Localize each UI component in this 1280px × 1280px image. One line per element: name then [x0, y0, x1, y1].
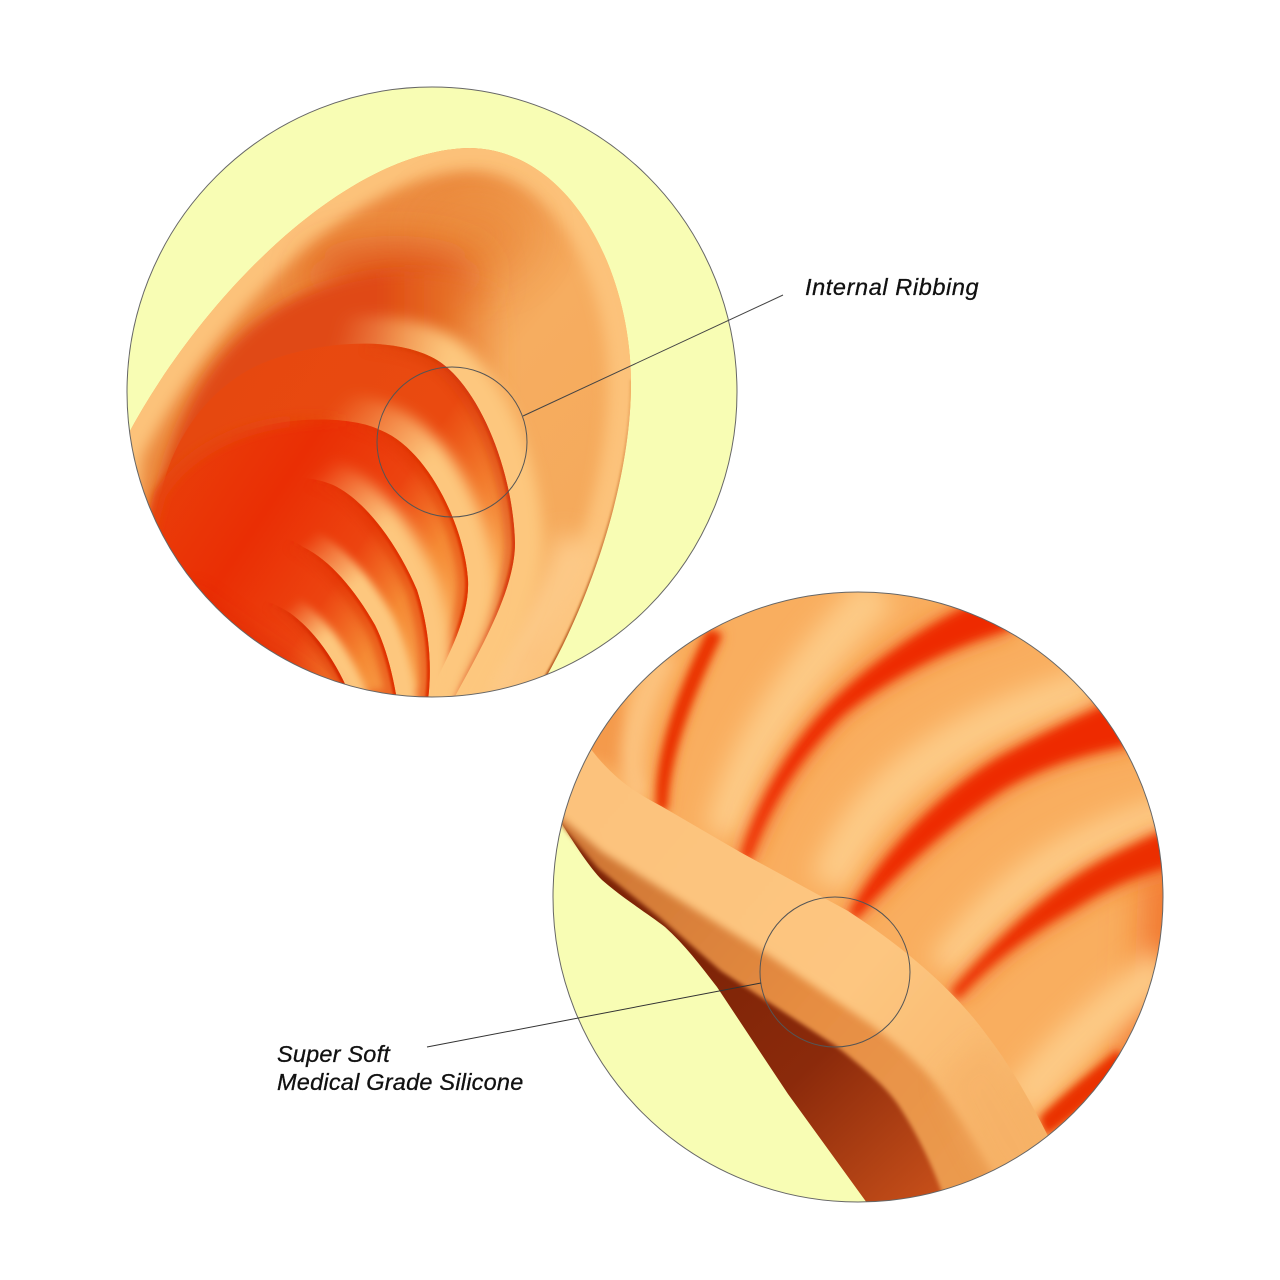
infographic — [126, 86, 1164, 1202]
label: super soft medical grade silicone: Medical Grade Silicone — [277, 1069, 523, 1095]
panel: internal ribbing magnified view — [126, 86, 738, 698]
circle outline — [553, 592, 1163, 1202]
label: internal ribbing: Internal Ribbing — [805, 274, 979, 300]
silicone rim illustration — [561, 592, 1162, 1202]
ribbed interior illustration — [130, 148, 631, 696]
leader line: silicone — [427, 983, 761, 1047]
rim shadow side — [562, 822, 944, 1202]
label: super soft medical grade silicone: Super Soft — [277, 1041, 391, 1067]
circle background — [127, 87, 737, 697]
rib halos and arches — [100, 344, 515, 720]
ribs area — [592, 592, 1162, 1136]
circle background — [553, 592, 1163, 1202]
label: super soft medical grade silicone — [277, 1041, 523, 1095]
rim mid band — [561, 815, 994, 1190]
leader line: internal ribbing — [523, 295, 783, 416]
detail circle: ribbing — [377, 367, 527, 517]
panel: silicone rim magnified view — [552, 592, 1164, 1202]
detail circle: silicone — [760, 897, 910, 1047]
circle outline — [127, 87, 737, 697]
rim lit band — [562, 750, 1048, 1172]
